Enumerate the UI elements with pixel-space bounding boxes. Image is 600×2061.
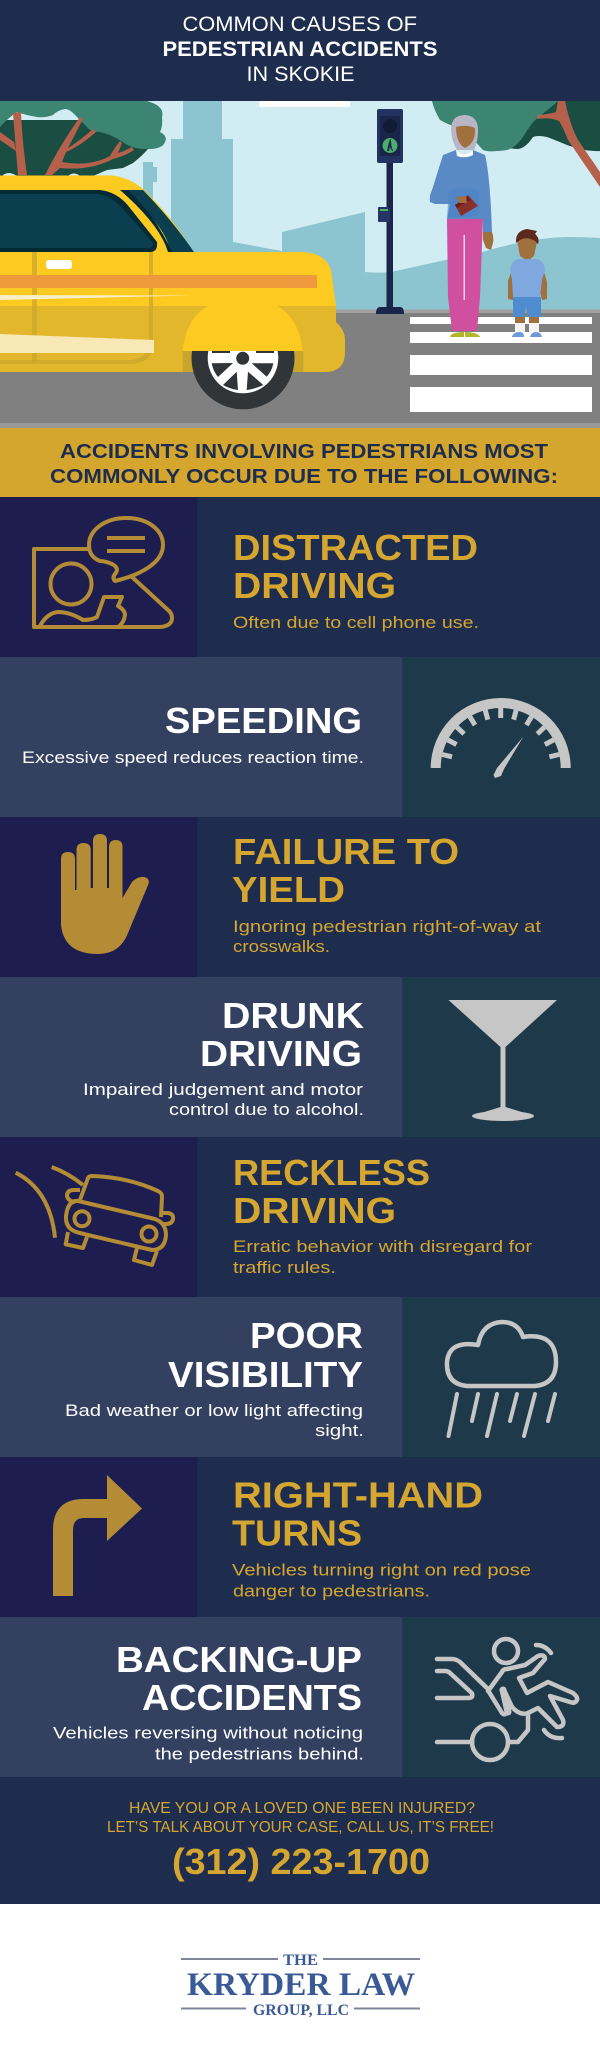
- panel: drunk driving: [0, 977, 600, 1137]
- text: distracted driving: DRIVING: [233, 565, 396, 606]
- text: distracted driving: DISTRACTED: [233, 527, 478, 568]
- icon: skidding car: [16, 1167, 173, 1265]
- text: distracted driving: [233, 527, 479, 632]
- icon: right turn arrow: [53, 1475, 142, 1596]
- logo: [181, 1952, 420, 2019]
- call to action: HAVE YOU OR A LOVED ONE BEEN INJURED?: [129, 1800, 475, 1817]
- text: speeding: Excessive speed reduces reaction time.: [22, 748, 364, 767]
- panel: poor visibility: [0, 1297, 600, 1457]
- text: backing-up accidents: the pedestrians behind.: [155, 1744, 364, 1764]
- banner heading: COMMONLY OCCUR DUE TO THE FOLLOWING:: [50, 465, 558, 488]
- banner heading: [0, 428, 600, 497]
- panel: distracted driving: [0, 497, 600, 657]
- logo: KRYDER LAW: [187, 1967, 415, 2003]
- text: backing-up accidents: ACCIDENTS: [142, 1677, 362, 1718]
- icon: martini glass: [448, 1000, 557, 1121]
- text: drunk driving: Impaired judgement and motor: [83, 1080, 363, 1099]
- text: poor visibility: POOR: [250, 1315, 363, 1356]
- text: right-hand turns: TURNS: [232, 1512, 362, 1554]
- icon: pedestrian hit by car: [437, 1639, 577, 1760]
- text: poor visibility: sight.: [315, 1421, 364, 1440]
- call to action: [0, 1777, 600, 1904]
- road: [0, 310, 600, 428]
- title: COMMON CAUSES OF: [182, 13, 417, 36]
- text: poor visibility: [65, 1315, 364, 1440]
- text: failure to yield: crosswalks.: [233, 937, 330, 956]
- panel: reckless driving: [0, 1137, 600, 1297]
- text: failure to yield: Ignoring pedestrian right-of-way at: [233, 917, 541, 936]
- text: distracted driving: Often due to cell phone use.: [233, 613, 479, 632]
- text: reckless driving: DRIVING: [233, 1190, 396, 1231]
- text: speeding: [22, 700, 364, 767]
- text: reckless driving: [233, 1152, 532, 1277]
- traffic signal: [376, 109, 404, 314]
- panel: backing-up accidents: [0, 1617, 600, 1777]
- text: drunk driving: DRUNK: [222, 995, 364, 1036]
- yellow car: [0, 176, 345, 409]
- text: reckless driving: traffic rules.: [233, 1258, 336, 1277]
- panel: failure to yield: [0, 817, 600, 977]
- logo: THE: [283, 1952, 318, 1969]
- text: drunk driving: DRIVING: [200, 1033, 362, 1074]
- text: drunk driving: control due to alcohol.: [169, 1100, 364, 1119]
- tree left: [0, 101, 166, 176]
- crosswalk: [410, 317, 592, 412]
- title: [0, 0, 600, 101]
- text: right-hand turns: [232, 1474, 531, 1600]
- call to action: (312) 223-1700: [172, 1841, 430, 1882]
- text: failure to yield: [232, 831, 541, 956]
- woman pedestrian: [430, 115, 493, 337]
- boy pedestrian: [508, 229, 547, 337]
- text: poor visibility: VISIBILITY: [168, 1354, 363, 1395]
- icon: phone and speech bubble: [34, 518, 172, 627]
- street scene illustration: [0, 101, 600, 428]
- icon: raised hand: [61, 834, 149, 954]
- text: right-hand turns: danger to pedestrians.: [233, 1582, 430, 1600]
- tree right: [432, 101, 600, 187]
- text: drunk driving: [83, 995, 364, 1119]
- text: backing-up accidents: [53, 1639, 364, 1764]
- icon: rain cloud: [447, 1322, 556, 1436]
- text: reckless driving: Erratic behavior with disregard for: [233, 1237, 532, 1256]
- logo: GROUP, LLC: [253, 2002, 349, 2019]
- text: reckless driving: RECKLESS: [233, 1152, 430, 1193]
- panel: right-hand turns: [0, 1457, 600, 1617]
- text: right-hand turns: RIGHT-HAND: [233, 1474, 483, 1516]
- text: backing-up accidents: BACKING-UP: [116, 1639, 362, 1680]
- text: backing-up accidents: Vehicles reversing without noticing: [53, 1724, 363, 1742]
- icon: speedometer: [431, 698, 571, 778]
- banner heading: ACCIDENTS INVOLVING PEDESTRIANS MOST: [60, 440, 549, 463]
- text: right-hand turns: Vehicles turning right on red pose: [232, 1560, 531, 1580]
- text: failure to yield: FAILURE TO: [233, 831, 459, 872]
- text: poor visibility: Bad weather or low light affecting: [65, 1401, 363, 1420]
- text: failure to yield: YIELD: [232, 869, 345, 910]
- call to action: LET’S TALK ABOUT YOUR CASE, CALL US, IT’S FREE!: [107, 1819, 494, 1836]
- wheel: [192, 351, 294, 410]
- title: PEDESTRIAN ACCIDENTS: [162, 38, 438, 61]
- title: IN SKOKIE: [246, 63, 354, 86]
- panel: speeding: [0, 657, 600, 817]
- text: speeding: SPEEDING: [165, 700, 362, 741]
